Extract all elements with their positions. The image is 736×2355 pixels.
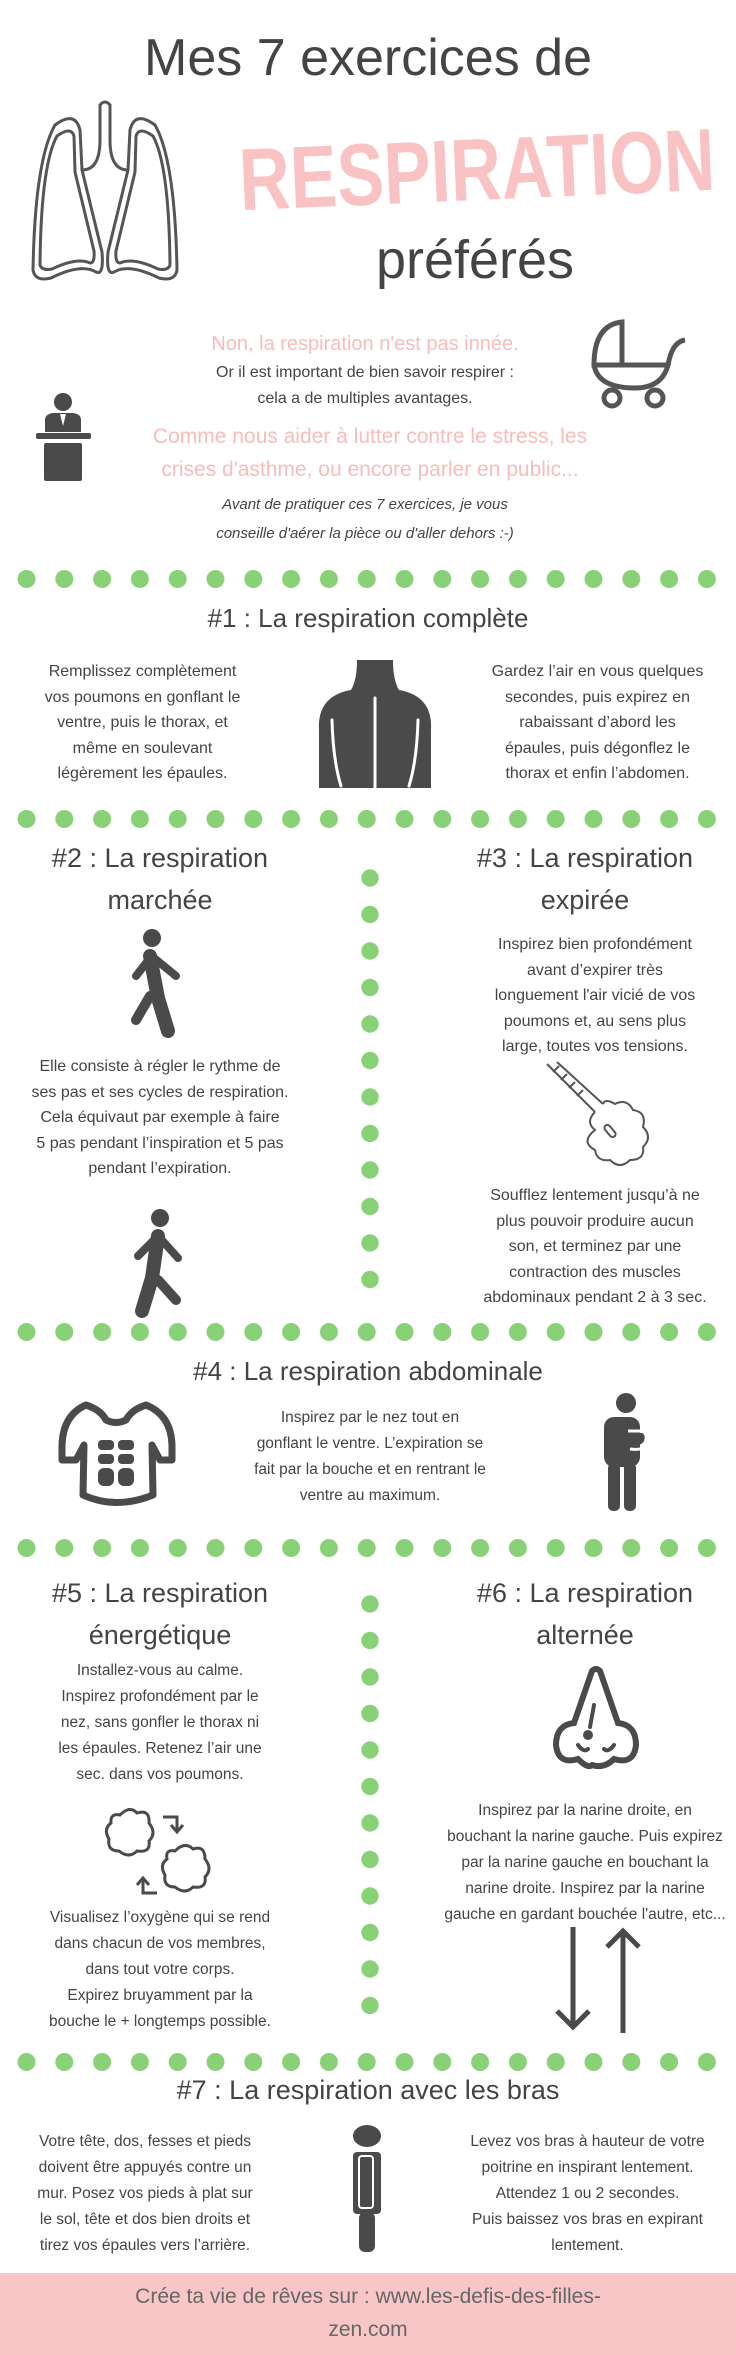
section 3 text — [495, 936, 695, 1055]
section 3 text: poumons et, au sens plus — [504, 1012, 686, 1030]
section 3 text 2: plus pouvoir produire aucun — [496, 1212, 694, 1230]
section 7 left text: le sol, tête et dos bien droits et — [40, 2211, 250, 2228]
section 5 text 2: Visualisez l’oxygène qui se rend — [50, 1909, 270, 1926]
section 5 text 2: bouche le + longtemps possible. — [49, 2013, 271, 2030]
icon: up/down arrows — [555, 1927, 641, 2033]
section 3 heading: expirée — [541, 885, 629, 915]
section 1 left text: Remplissez complètement — [49, 663, 236, 680]
section 7 left text: Votre tête, dos, fesses et pieds — [39, 2133, 251, 2150]
section 5 text: Inspirez profondément par le — [61, 1688, 259, 1705]
section 6 text: narine droite. Inspirez par la narine — [465, 1880, 705, 1897]
icon: clouds with arrows — [104, 1808, 210, 1894]
section 3 heading: #3 : La respiration — [477, 843, 693, 873]
section 5 text 2 — [49, 1909, 271, 2030]
section 5 heading: #5 : La respiration — [52, 1578, 268, 1608]
section 5 text 2: Expirez bruyamment par la — [67, 1987, 253, 2004]
section 2 heading — [52, 843, 268, 915]
section 7 right text: Puis baissez vos bras en expirant — [472, 2211, 703, 2228]
section 4 text: ventre au maximum. — [300, 1487, 440, 1504]
section 3 text: longuement l'air vicié de vos — [495, 987, 695, 1004]
section 2 text: Elle consiste à régler le rythme de — [40, 1058, 280, 1075]
section 6 text: par la narine gauche en bouchant la — [461, 1854, 709, 1871]
section 7 right text: poitrine en inspirant lentement. — [482, 2159, 693, 2176]
section 5 text: les épaules. Retenez l’air une — [58, 1740, 262, 1757]
italic advice: Avant de pratiquer ces 7 exercices, je vous — [222, 496, 508, 513]
section 6 text: bouchant la narine gauche. Puis expirez — [447, 1828, 723, 1845]
section 3 text: avant d’expirer très — [527, 962, 663, 978]
title line 3: préférés — [376, 230, 574, 290]
section 2 text: ses pas et ses cycles de respiration. — [31, 1084, 288, 1100]
section 3 text 2: abdominaux pendant 2 à 3 sec. — [483, 1289, 707, 1306]
section 1 left text: vos poumons en gonflant le — [45, 688, 240, 706]
pink benefits text: crises d'asthme, ou encore parler en public... — [161, 458, 579, 481]
section 4 text — [254, 1409, 486, 1504]
section 2 text: pendant l’expiration. — [88, 1160, 232, 1177]
section 2 heading: marchée — [107, 885, 213, 915]
text: cela a de multiples avantages. — [257, 390, 473, 407]
pink benefits text — [153, 425, 587, 481]
section 5 heading: énergétique — [89, 1620, 231, 1650]
icon: walker 2 — [134, 1209, 182, 1318]
section 2 text: 5 pas pendant l’inspiration et 5 pas — [36, 1134, 284, 1152]
section 7 right text: Levez vos bras à hauteur de votre — [470, 2133, 705, 2150]
footer — [0, 2273, 736, 2355]
section 1 right text: thorax et enfin l’abdomen. — [505, 765, 690, 782]
section 5 text: nez, sans gonfler le thorax ni — [61, 1714, 259, 1731]
section 5 text 2: dans tout votre corps. — [85, 1961, 235, 1978]
section 7 left text — [37, 2133, 253, 2254]
section 6 heading: alternée — [536, 1620, 634, 1650]
section 7 heading: #7 : La respiration avec les bras — [177, 2075, 559, 2105]
section 4 text: Inspirez par le nez tout en — [281, 1409, 459, 1426]
icon: standing person — [353, 2125, 381, 2252]
footer text: zen.com — [328, 2318, 408, 2341]
section 7 left text: mur. Posez vos pieds à plat sur — [37, 2185, 253, 2202]
section 3 text 2: Soufflez lentement jusqu’à ne — [490, 1187, 700, 1204]
section 3 text 2: contraction des muscles — [509, 1264, 681, 1280]
section 4 heading: #4 : La respiration abdominale — [193, 1356, 543, 1386]
section 1 left text: légèrement les épaules. — [58, 765, 227, 782]
section 6 heading — [477, 1578, 693, 1650]
title line 1: Mes 7 exercices de — [144, 29, 592, 87]
section 3 heading — [477, 843, 693, 915]
italic advice — [216, 496, 514, 542]
icon: lungs — [32, 100, 178, 280]
section 4 text: fait par la bouche et en rentrant le — [254, 1461, 486, 1478]
section 6 text: gauche en gardant bouchée l'autre, etc... — [444, 1906, 726, 1923]
section 2 text: Cela équivaut par exemple à faire — [40, 1109, 280, 1126]
section 1 right text: Gardez l’air en vous quelques — [492, 663, 703, 680]
section 5 text: Installez-vous au calme. — [77, 1662, 243, 1679]
section 7 right text: Attendez 1 ou 2 secondes. — [496, 2185, 679, 2202]
section 1 heading: #1 : La respiration complète — [208, 603, 528, 633]
section 1 right text: épaules, puis dégonflez le — [505, 740, 690, 756]
section 5 text 2: dans chacun de vos membres, — [54, 1935, 266, 1952]
icon: speaker podium — [36, 393, 91, 481]
section 6 text — [444, 1802, 726, 1923]
italic advice: conseille d'aérer la pièce ou d'aller dehors :-) — [216, 525, 514, 542]
section 7 left text: tirez vos épaules vers l’arrière. — [40, 2237, 250, 2254]
icon: stroller — [592, 319, 686, 408]
footer text — [135, 2285, 601, 2341]
section 1 left text — [44, 663, 240, 782]
section 2 text — [31, 1058, 288, 1177]
icon: back — [318, 660, 432, 788]
section 7 left text: doivent être appuyés contre un — [39, 2159, 251, 2176]
section 7 right text — [470, 2133, 705, 2254]
section 3 text 2: son, et terminez par une — [509, 1238, 681, 1255]
section 1 left text: ventre, puis le thorax, et — [57, 714, 228, 731]
section 1 right text: secondes, puis expirez en — [505, 688, 690, 706]
footer text: Crée ta vie de rêves sur : www.les-defis-des-filles- — [135, 2285, 601, 2308]
section 4 text: gonflant le ventre. L’expiration se — [257, 1435, 483, 1452]
section 1 right text — [492, 663, 703, 782]
section 2 heading: #2 : La respiration — [52, 843, 268, 873]
icon: nose — [553, 1666, 639, 1770]
section 1 right text: rabaissant d’abord les — [519, 714, 676, 731]
section 5 heading — [52, 1578, 268, 1650]
text: Or il est important de bien savoir respirer : — [216, 364, 514, 381]
section 6 text: Inspirez par la narine droite, en — [478, 1802, 692, 1819]
section 1 left text: même en soulevant — [73, 740, 212, 756]
section 7 right text: lentement. — [551, 2237, 624, 2254]
section 3 text 2 — [483, 1187, 707, 1306]
icon: exhale cloud — [546, 1061, 650, 1166]
icon: walker 1 — [131, 929, 180, 1038]
icon: abs torso — [58, 1402, 176, 1506]
intro text: Non, la respiration n'est pas innée. — [211, 333, 519, 355]
icon: standing man holding belly — [604, 1393, 645, 1511]
section 3 text: large, toutes vos tensions. — [502, 1038, 688, 1055]
section 5 text: sec. dans vos poumons. — [76, 1766, 244, 1783]
section 5 text — [58, 1662, 262, 1783]
section 3 text: Inspirez bien profondément — [498, 936, 692, 953]
section 6 heading: #6 : La respiration — [477, 1578, 693, 1608]
pink benefits text: Comme nous aider à lutter contre le stress, les — [153, 425, 587, 448]
